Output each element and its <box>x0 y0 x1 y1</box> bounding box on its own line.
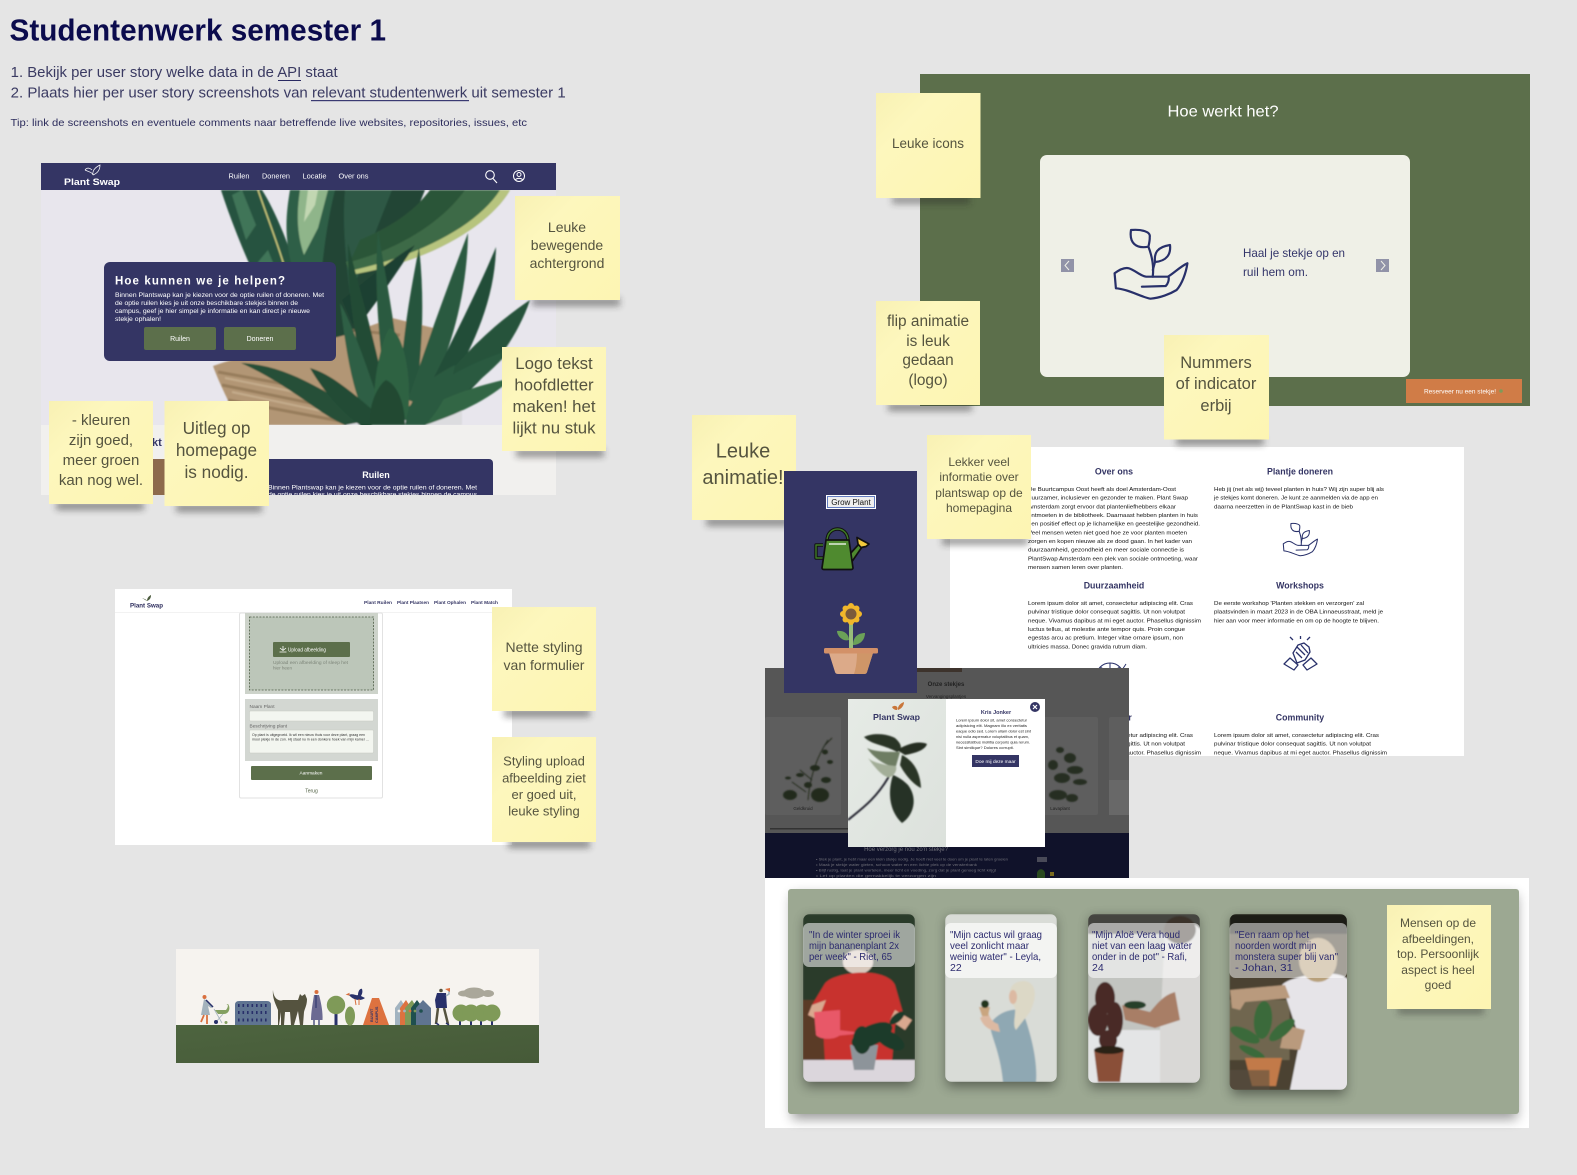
sticky note: Leuke icons: Leuke icons <box>892 135 964 151</box>
column: Plantje doneren <box>1213 466 1384 556</box>
sticky note: Mensen op de afbeeldingen <box>1387 905 1491 1014</box>
sticky note: kleuren: meer groen <box>63 452 139 469</box>
sticky note: Lekker veel informatie <box>927 435 1031 545</box>
orange tent: CAMPUS <box>375 1006 379 1023</box>
sticky note: Nummers of indicator: of indicator <box>1176 375 1257 393</box>
sticky note: Mensen op de afbeeldingen: Mensen op de <box>1400 916 1476 930</box>
sticky note: Nummers of indicator: Nummers <box>1180 354 1252 372</box>
logo icon <box>85 165 100 175</box>
testimonial card: Johan: monstera super blij van" <box>1235 951 1338 963</box>
plant cards: Lavaplant <box>1050 806 1071 811</box>
column: Workshops: plaatsvinden in maart 2023 in de OBA Linnaeusstraat, meld je <box>1214 610 1383 616</box>
testimonial card: Rafi: "Mijn Aloë Vera houd <box>1092 929 1180 941</box>
fields block: mooi plekje in de zon. Hij staat nu in een donkere hoek van mijn kamer ... <box>252 738 369 742</box>
column: Over ons: PlantSwap Amsterdam een plek van sociale ontmoeting, waar <box>1028 556 1198 562</box>
title: Studentenwerk semester 1 <box>10 14 386 48</box>
screenshot: dark modal page: Hoe verzorg je nou zo'n stekje? <box>864 847 949 853</box>
sticky note: Leuke bewegende achtergrond <box>515 196 620 306</box>
column: Duurzaamheid: egestas arcu ac pretium. Integer vitae ornare ipsum, non <box>1028 636 1183 642</box>
nav links <box>228 174 369 180</box>
column: Duurzaamheid <box>1028 582 1201 668</box>
sticky note: Leuke animatie: animatie! <box>702 467 784 489</box>
fields block: Beschrijving plant <box>250 724 288 730</box>
modal text: Kris Jonker <box>981 710 1012 716</box>
sticky note: Nummers of indicator <box>1164 335 1269 445</box>
back link: Terug <box>305 788 318 794</box>
testimonial card: Leyla: "Mijn cactus wil graag <box>950 929 1042 941</box>
navigation bar <box>41 163 556 190</box>
column: Community: pulvinar tristique dolor consequat sagittis. Ut non volutpat <box>1214 742 1371 748</box>
nav links: Ruilen <box>228 174 250 180</box>
sticky note: Leuke animatie <box>692 415 796 526</box>
testimonial card: Riet: "In de winter sproei ik <box>809 929 901 941</box>
column: Community: Community <box>1276 712 1324 722</box>
person in coat <box>311 990 323 1025</box>
sticky note: kleuren: - kleuren <box>72 412 130 429</box>
plant cards: Geldkruid <box>793 806 813 811</box>
sticky note: Styling upload afbeelding: Styling upload <box>503 754 585 768</box>
hero card: Hoe kunnen we je helpen? <box>115 276 285 288</box>
sticky note: kleuren: zijn goed, <box>69 432 133 449</box>
screenshot: upload form: Plant Swap <box>130 604 163 610</box>
section heading: Onze stekjes <box>928 682 965 688</box>
column: Plantje doneren: daarna neerzetten in de PlantSwap kast in de bieb <box>1214 504 1353 510</box>
button: Reserveer nu een stekje: Reserveer nu een stekje! <box>1424 390 1496 396</box>
icon: hand with seedling <box>1115 230 1187 299</box>
column: Community: neque. Vivamus dapibus at mi eget auctor. Phasellus dignissim <box>1214 750 1387 756</box>
form logo <box>142 595 151 601</box>
sticky note: Styling upload afbeelding: leuke styling <box>508 804 580 818</box>
testimonial card: Rafi <box>1088 914 1205 1083</box>
panel: Ruilen: Ruilen <box>362 470 390 480</box>
arrow: previous <box>1061 259 1074 272</box>
footer band <box>765 833 1129 878</box>
column: Community <box>1214 712 1387 756</box>
column: Over ons: een positief effect op je lichamelijke en geestelijke gezondheid. <box>1028 522 1200 528</box>
column: Over ons: mensen samen leren over planten. <box>1028 565 1123 571</box>
screenshot: homepage hero <box>41 163 556 509</box>
screenshot: upload form <box>115 589 512 845</box>
hero card: Binnen Plantswap kan je kiezen voor de optie ruilen of doneren. Met <box>115 292 324 299</box>
carousel card <box>1040 155 1410 377</box>
modal text: necessitatibus mollitia corporis quia rerum. <box>956 740 1030 744</box>
panel: Hoe werkt het carousel: Hoe werkt het? <box>1168 104 1279 120</box>
button: Doneren <box>224 327 296 350</box>
fields block: Op plant is uitgegroeid. Ik wil een nieuw thuis voor deze plant, graag een <box>252 733 365 737</box>
icon: user <box>514 170 524 182</box>
panel: Ruilen: de optie ruilen kies je uit onze beschikbare stekjes binnen de campus <box>268 492 478 498</box>
column: Over ons: duurzamer, inclusiever en gezonder te maken. Plant Swap <box>1028 496 1188 502</box>
instructions text block <box>11 65 566 102</box>
testimonial card: Leyla: weinig water" - Leyla, <box>949 951 1041 963</box>
cloud <box>458 988 494 998</box>
column: Over ons: Over ons <box>1095 466 1133 476</box>
column: Workshops: De eerste workshop 'Planten stekken en verzorgen' zal <box>1214 601 1364 607</box>
form nav links: Plant Ruilen <box>364 600 392 605</box>
modal text: adipisicing elit. Magnam illo ex veritatis <box>956 724 1027 728</box>
column: Karakter: Karakter <box>1096 712 1132 722</box>
sticky note: flip animatie <box>876 301 980 411</box>
hero card <box>104 262 336 361</box>
testimonial card: Riet: mijn bananenplant 2x <box>809 940 900 952</box>
panel: testimonials <box>765 878 1529 1128</box>
instructions text block: 2. Plaats hier per user story screenshots van relevant studentenwerk uit semester 1 <box>11 86 566 102</box>
panel: Grow Plant animation <box>784 471 917 693</box>
column: Karakter: neque. Vivamus dapibus at mi eget auctor. Phasellus dignissim <box>1028 750 1201 756</box>
sticky note: Lekker veel informatie: plantswap op de <box>935 486 1023 500</box>
orange tent: BUURT <box>370 1008 374 1022</box>
sticky note: Logo tekst: Logo tekst <box>515 354 593 373</box>
cut-off photo <box>153 459 167 495</box>
sticky note: Uitleg op homepage <box>164 401 269 512</box>
icon: search <box>486 171 497 183</box>
column: Plantje doneren: je stekjes komt doneren. Je kunt ze aanmelden via de app en <box>1213 496 1378 502</box>
sticky note: flip animatie: flip animatie <box>887 313 969 330</box>
modal text <box>956 710 1032 750</box>
column: Duurzaamheid: neque. Vivamus dapibus at mi eget auctor. Phasellus dignissim <box>1028 618 1201 624</box>
sticky note: flip animatie: gedaan <box>902 352 954 369</box>
button: Ruilen <box>144 327 216 350</box>
sticky note: Logo tekst: maken! het <box>512 397 596 416</box>
hero photo: plants <box>212 190 530 425</box>
sticky note: Mensen op de afbeeldingen: top. Persoonlijk <box>1397 947 1480 961</box>
testimonial card: Johan: noorden wordt mijn <box>1235 940 1317 952</box>
screenshot: dark modal page: • Maak je stekje water gieten, schoon water en een lichte plek op de vensterbank <box>816 863 977 867</box>
submit button: Aanmaken <box>300 770 323 776</box>
modal <box>848 699 1045 847</box>
button: Ruilen: Ruilen <box>170 336 190 343</box>
fields block: Naam Plant <box>250 704 275 710</box>
logo text: Plant Swap <box>64 177 120 188</box>
upload block: Upload een afbeelding of sleep het <box>273 660 349 666</box>
panel: Hoe werkt het carousel <box>920 74 1530 406</box>
cat <box>273 990 307 1025</box>
panel: Ruilen: Binnen Plantswap kan je kiezen voor de optie ruilen of doneren. Met <box>268 484 477 492</box>
woman with stroller <box>201 995 229 1024</box>
bird <box>347 989 365 1005</box>
testimonial card: Johan: "Een raam op het <box>1235 929 1309 941</box>
icon: flower pot <box>824 603 878 674</box>
form nav links <box>364 600 498 605</box>
plant: bushy <box>1048 747 1087 802</box>
column: Karakter <box>1129 716 1201 756</box>
carousel text: ruil hem om. <box>1243 265 1308 279</box>
column: Karakter: Lorem ipsum dolor sit amet, consectetur adipiscing elit. Cras <box>1028 733 1193 739</box>
button: Grow Plant <box>826 496 876 508</box>
sticky note: Lekker veel informatie: homepagina <box>946 501 1012 515</box>
column: Duurzaamheid: Lorem ipsum dolor sit amet, consectetur adipiscing elit. Cras <box>1028 601 1193 607</box>
screenshot: dark modal page: Vervangingsplantjes <box>926 694 967 699</box>
sticky note: Leuke icons <box>876 93 980 204</box>
column: Duurzaamheid: ultricies massa. Donec gravida rutrum diam. <box>1028 644 1147 650</box>
screenshot: dark modal page: • Let op planten die gemakkelijk te verzorgen zijn <box>816 874 936 878</box>
sticky note: Lekker veel informatie: Lekker veel <box>948 455 1010 469</box>
upload block: hier heen <box>273 666 292 672</box>
column: Workshops: hier aan voor meer informatie en om op de hoogte te blijven. <box>1214 618 1379 624</box>
sticky note: Leuke bewegende achtergrond: bewegende <box>531 237 603 253</box>
button: Reserveer nu een stekje <box>1406 379 1522 403</box>
form card <box>240 613 382 798</box>
column: Duurzaamheid: Duurzaamheid <box>1084 580 1144 590</box>
modal text: nisi nulla aspernatur voluptatibus et quam, <box>956 735 1029 739</box>
modal image: plant <box>848 699 946 847</box>
tree <box>327 996 345 1025</box>
testimonial card: Riet: per week" - Riet, 65 <box>809 951 892 963</box>
panel: Ruilen <box>269 459 493 495</box>
nav links: Doneren <box>262 174 290 180</box>
testimonial card: Riet <box>803 914 915 1082</box>
banner illustration: Buurtcampus <box>176 949 539 1063</box>
bush <box>345 1006 355 1026</box>
upload block: Upload afbeelding <box>288 648 326 654</box>
carousel text <box>1243 246 1345 279</box>
column: Community: Lorem ipsum dolor sit amet, consectetur adipiscing elit. Cras <box>1214 733 1379 739</box>
testimonial card: Johan <box>1228 914 1350 1090</box>
arrow: next <box>1376 259 1389 272</box>
form nav links: Plant Ophalen <box>434 600 466 605</box>
modal text: eaque odio sed. Lorem ullam dolor est sint <box>956 730 1032 734</box>
upload block <box>245 613 378 694</box>
testimonial card: Leyla: 22 <box>950 962 962 974</box>
modal text: Sint similique? Dolores corrupti. <box>956 746 1014 750</box>
nav links: Over ons <box>338 174 369 180</box>
column: Workshops: Workshops <box>1276 580 1324 590</box>
modal button <box>972 755 1019 767</box>
column: Plantje doneren: Heb jij (net als wij) teveel planten in huis? Wij zijn super blij als <box>1214 487 1384 493</box>
person with megaphone <box>435 988 450 1025</box>
sticky note: Logo tekst: hoofdletter <box>514 376 594 394</box>
form nav links: Plant Match <box>471 600 498 605</box>
sticky note: Styling upload afbeelding: er goed uit, <box>511 787 577 802</box>
testimonial card: Rafi: onder in de pot" - Rafi, <box>1092 951 1187 963</box>
testimonial card: Johan: - Johan, 31 <box>1235 962 1293 974</box>
form nav links: Plant Plaatsen <box>397 600 429 605</box>
sticky note: Uitleg op homepage: Uitleg op <box>183 418 250 438</box>
screenshot: dark modal page <box>765 668 1134 878</box>
sticky note: Uitleg op homepage: homepage <box>176 440 257 460</box>
column: Duurzaamheid: luctus tellus, at molestie ante tempor quis. Proin congue <box>1028 627 1185 633</box>
testimonial card: Rafi: niet van een laag water <box>1092 940 1192 952</box>
fields block <box>245 699 378 761</box>
screenshot: information page <box>950 447 1464 756</box>
hero card: de optie ruilen kies je uit onze beschikbare stekjes binnen de <box>115 300 299 307</box>
sticky note: Leuke animatie: Leuke <box>716 440 770 462</box>
sticky note: Leuke bewegende achtergrond: achtergrond <box>530 255 604 271</box>
tree row <box>452 1004 500 1025</box>
row of houses <box>395 1000 431 1025</box>
icon: hand with seedling <box>1283 523 1317 556</box>
sticky note: Mensen op de afbeeldingen: aspect is heel <box>1401 963 1475 977</box>
column: Over ons <box>1028 466 1200 571</box>
modal logo: Plant Swap <box>873 712 920 722</box>
sticky note: flip animatie: is leuk <box>906 333 950 350</box>
icon: handshake <box>1284 636 1317 670</box>
orange tent <box>363 998 389 1025</box>
card shadows <box>805 918 1345 1094</box>
button: Grow Plant: Grow Plant <box>831 498 872 507</box>
testimonial card: Leyla <box>945 914 1057 1082</box>
nav links: Locatie <box>302 174 327 180</box>
building <box>235 1001 271 1025</box>
plant: eucalyptus <box>783 738 833 802</box>
sticky note: Uitleg op homepage: is nodig. <box>184 462 249 482</box>
hero card: campus, geef je hier simpel je informatie en kan direct je nieuwe <box>115 308 311 315</box>
sticky note: Nette styling van formulier: Nette styling <box>505 639 583 655</box>
plant cards <box>782 738 1129 815</box>
submit button <box>251 766 372 780</box>
ground <box>176 1025 539 1063</box>
sticky note: Logo tekst: lijkt nu stuk <box>512 418 596 438</box>
sticky note: Styling upload afbeelding <box>492 737 596 848</box>
tip text: Tip: link de screenshots en eventuele comments naar betreffende live websites, repositories, issues, etc <box>10 117 527 129</box>
column: Over ons: zorgen en kopen nieuwe als ze dood gaan. In het kader van <box>1028 539 1192 545</box>
sticky note: flip animatie: (logo) <box>908 372 948 389</box>
lower section of homepage <box>41 425 556 495</box>
sticky note: Lekker veel informatie: informatie over <box>939 470 1019 484</box>
sticky note: Nette styling van formulier <box>492 607 596 717</box>
column: Plantje doneren: Plantje doneren <box>1267 466 1333 476</box>
column: Over ons: ontmoeten in de bibliotheek. Daarnaast hebben planten in huis <box>1028 513 1198 519</box>
sticky note: Logo tekst <box>502 347 606 457</box>
button: Doneren: Doneren <box>247 336 274 343</box>
sticky note: kleuren: kan nog wel. <box>59 472 143 489</box>
modal text: Lorem ipsum dolor sit, amet consectetur <box>956 718 1028 722</box>
column: Over ons: Amsterdam zorgt ervoor dat plantenliefhebbers elkaar <box>1028 504 1176 510</box>
cut-off heading: kt <box>152 437 162 449</box>
column: Over ons: duurzaamheid, gezondheid en meer sociale connectie is <box>1028 548 1184 554</box>
instructions text block: 1. Bekijk per user story welke data in de API staat <box>11 65 338 81</box>
sticky note: Styling upload afbeelding: afbeelding ziet <box>502 770 586 786</box>
icon: watering can <box>816 529 869 570</box>
icon: globe <box>1098 662 1126 668</box>
column: Workshops <box>1214 580 1383 670</box>
sticky note: Nette styling van formulier: van formulier <box>504 657 585 673</box>
sticky note: Mensen op de afbeeldingen: afbeeldingen, <box>1402 932 1474 946</box>
column: Over ons: Veel mensen weten niet goed hoe ze voor planten moeten <box>1028 530 1187 536</box>
hero card: stekje ophalen! <box>115 316 161 323</box>
screenshot: dark modal page: • Blijf rustig, laat je plant wortelen, meer licht en voeding, zorg dat je plant genoeg licht krijgt <box>816 868 997 872</box>
sticky note: Nummers of indicator: erbij <box>1200 397 1232 415</box>
column: Duurzaamheid: pulvinar tristique dolor consequat sagittis. Ut non volutpat <box>1028 610 1185 616</box>
column: Karakter: pulvinar tristique dolor consequat sagittis. Ut non volutpat <box>1028 742 1185 748</box>
sticky note: Leuke bewegende achtergrond: Leuke <box>548 219 586 235</box>
testimonial card: Rafi: 24 <box>1092 962 1104 974</box>
modal button: Doe mij deze maar <box>975 759 1016 765</box>
screenshot: dark modal page: • Stek je plant, je hebt maar een klein stukje nodig. Je hoeft niet veel te doen om je plant te laten groeien <box>816 858 1008 862</box>
testimonial card: Leyla: veel zonlicht maar <box>950 940 1029 952</box>
modal logo <box>873 702 920 722</box>
column: Over ons: De Buurtcampus Oost heeft als doel Amsterdam-Oost <box>1028 487 1176 493</box>
carousel text: Haal je stekje op en <box>1243 246 1345 260</box>
sticky note: Mensen op de afbeeldingen: goed <box>1425 978 1451 992</box>
icon: close <box>1030 702 1040 712</box>
sticky note: kleuren <box>49 401 153 510</box>
